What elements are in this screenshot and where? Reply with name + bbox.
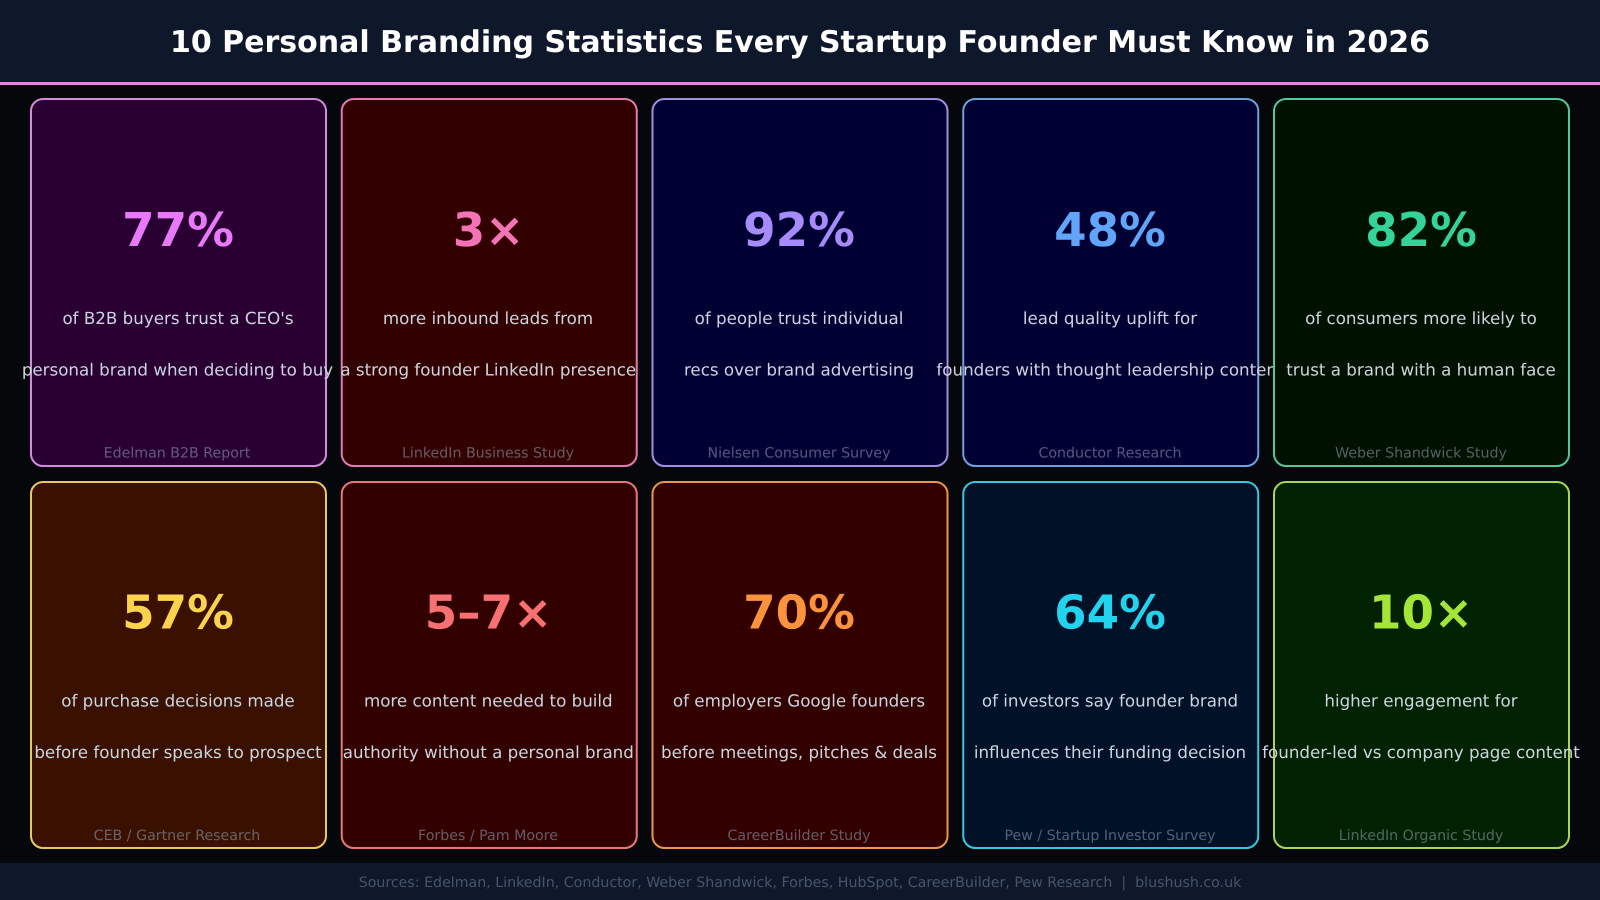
panel: stat 5 <box>1274 99 1569 466</box>
panel: stat 4 <box>936 99 1284 466</box>
panel: stat 9: 64% <box>1054 586 1166 640</box>
panel: stat 6: of purchase decisions made <box>61 690 295 710</box>
panel: stat 2: LinkedIn Business Study <box>402 446 574 462</box>
panel: stat 7 <box>342 482 637 848</box>
panel: stat 2: more inbound leads from <box>383 308 593 328</box>
panel: stat 1: of B2B buyers trust a CEO's <box>62 308 294 328</box>
panel: stat 10: higher engagement for <box>1324 690 1518 710</box>
panel: stat 10 <box>1262 482 1580 848</box>
panel: stat 5: Weber Shandwick Study <box>1335 446 1507 462</box>
panel: stat 8: 70% <box>743 586 855 640</box>
panel: stat 9: influences their funding decision <box>974 742 1246 762</box>
panel: stat 6: 57% <box>122 586 234 640</box>
panel: stat 10: founder-led vs company page content <box>1262 742 1580 762</box>
panel: stat 1: 77% <box>122 204 234 258</box>
panel: stat 9: of investors say founder brand <box>982 690 1238 710</box>
panel: stat 8: CareerBuilder Study <box>727 828 871 844</box>
panel: stat 3: recs over brand advertising <box>684 360 914 380</box>
header banner <box>0 0 1600 85</box>
panel: stat 7: more content needed to build <box>364 690 613 710</box>
panel: stat 9 <box>963 482 1258 848</box>
panel: stat 5: of consumers more likely to <box>1305 308 1537 328</box>
panel: stat 7: Forbes / Pam Moore <box>418 828 558 844</box>
panel: stat 3: of people trust individual <box>695 308 903 328</box>
panel: stat 4: Conductor Research <box>1038 446 1182 462</box>
panel: stat 2: 3× <box>453 204 524 258</box>
panel: stat 6: before founder speaks to prospect <box>34 742 322 762</box>
panel: stat 10: 10× <box>1369 586 1473 640</box>
panel: stat 5: trust a brand with a human face <box>1286 360 1556 380</box>
panel: stat 8: before meetings, pitches & deals <box>661 742 937 762</box>
panel: stat 4: founders with thought leadership content <box>936 360 1284 380</box>
panel: stat 4: 48% <box>1054 204 1166 258</box>
panel: stat 9: Pew / Startup Investor Survey <box>1005 828 1215 844</box>
footer sources: Sources: Edelman, LinkedIn, Conductor, Weber Shandwick, Forbes, HubSpot, CareerBuilder, Pew Research | blushush.co.uk <box>359 875 1242 891</box>
panel: stat 1 <box>22 99 333 466</box>
panel: stat 4: lead quality uplift for <box>1023 308 1197 328</box>
panel: stat 6 <box>31 482 326 848</box>
panel: stat 3 <box>652 99 948 466</box>
panel: stat 3: 92% <box>743 204 855 258</box>
footer bar <box>0 863 1600 900</box>
panel: stat 10: LinkedIn Organic Study <box>1339 828 1503 844</box>
panel: stat 7: 5–7× <box>425 586 552 640</box>
panel: stat 3: Nielsen Consumer Survey <box>707 446 891 462</box>
panel: stat 1: personal brand when deciding to buy <box>22 360 333 380</box>
panel: stat 2 <box>340 99 637 466</box>
panel: stat 1: Edelman B2B Report <box>104 446 251 462</box>
title: 10 Personal Branding Statistics Every Startup Founder Must Know in 2026 <box>170 25 1430 60</box>
panel: stat 7: authority without a personal brand <box>343 742 634 762</box>
panel: stat 8: of employers Google founders <box>673 690 925 710</box>
panel: stat 5: 82% <box>1365 204 1477 258</box>
panel: stat 8 <box>652 482 948 848</box>
panel: stat 2: a strong founder LinkedIn presence <box>340 360 636 380</box>
panel: stat 6: CEB / Gartner Research <box>94 828 260 844</box>
